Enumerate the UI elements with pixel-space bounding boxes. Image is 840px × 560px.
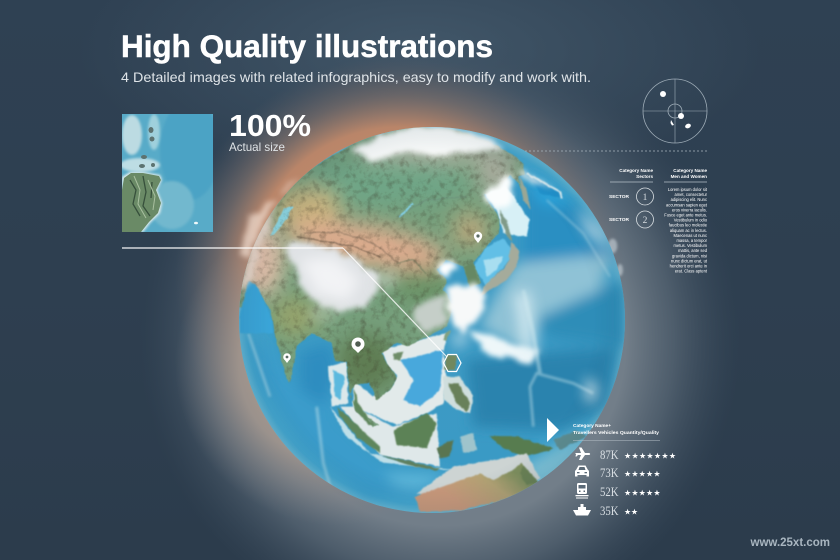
Caspian sea	[271, 207, 293, 235]
lorem ipsum paragraph: mattis, ante sed	[678, 248, 708, 253]
lorem ipsum paragraph: Vestibulum in odio	[674, 218, 708, 223]
map pin: Japan sea region	[474, 232, 482, 243]
Himalaya cloud	[282, 242, 380, 312]
table: description column: Men and Women	[671, 174, 707, 179]
row: plane 87K: ★★★★★★★	[624, 452, 676, 460]
lorem ipsum paragraph	[664, 187, 708, 274]
shallow seas	[328, 173, 562, 470]
sector row 2	[609, 211, 654, 228]
panel heading: Category Name+	[573, 423, 611, 429]
map pin: India	[283, 353, 291, 363]
lorem ipsum paragraph: massa, a tempor	[676, 238, 708, 243]
sector row 2: SECTOR	[609, 217, 629, 223]
Philippines and Indonesia	[337, 377, 587, 471]
Red Sea and west fringe	[240, 280, 273, 333]
hexagon marker	[444, 354, 461, 372]
lorem ipsum paragraph: adipiscing elit. Nunc	[671, 197, 707, 202]
Japan and Korea	[393, 177, 531, 370]
big stat: 100%: 100%	[229, 108, 311, 143]
subtitle: 4 Detailed images with related infographics, easy to modify and work with.	[121, 69, 591, 85]
sector row 1: SECTOR	[609, 194, 629, 200]
ocean light ridges	[248, 200, 610, 497]
row: car 73K: ★★★★★	[624, 470, 660, 478]
lorem ipsum paragraph: aliquam ac in lectus.	[670, 228, 707, 233]
New Guinea	[490, 437, 553, 457]
row: train 52K	[576, 483, 660, 499]
table: sectors column: Sectors	[636, 174, 653, 179]
row: plane 87K	[575, 448, 676, 462]
ocean	[235, 124, 630, 519]
lorem ipsum paragraph: Maecenas ut nunc	[674, 233, 707, 238]
stat caption: Actual size	[229, 140, 285, 154]
table: sectors column: Category Name	[619, 168, 653, 173]
panel heading: Travellers Vehicles Quantity/Quality	[573, 430, 659, 436]
lorem ipsum paragraph: gravida dictum, nisi	[672, 253, 707, 258]
radar chart	[643, 79, 707, 143]
lorem ipsum paragraph: faucibus leo molestie	[669, 223, 708, 228]
lorem ipsum paragraph: Lorem ipsum dolor sit	[668, 187, 708, 192]
row: car 73K: 73K	[600, 466, 618, 480]
lorem ipsum paragraph: eros viverra iaculis.	[672, 207, 707, 212]
row: train 52K: 52K	[600, 485, 618, 499]
leader line from inset to hexagon	[122, 248, 447, 357]
lorem ipsum paragraph: nunc dictum erat, ut	[671, 258, 708, 263]
Asia land mass	[240, 128, 525, 428]
sector row 2: 2	[643, 216, 648, 226]
map pin: Southeast Asia	[352, 338, 364, 353]
title: High Quality illustrations	[121, 28, 493, 64]
globe	[233, 120, 630, 519]
table: description column	[664, 168, 708, 274]
watermark: www.25xt.com	[750, 537, 830, 549]
row: car 73K	[575, 466, 660, 480]
lorem ipsum paragraph: erat. Class aptent	[675, 269, 708, 274]
panel heading	[573, 423, 659, 436]
sector row 1	[609, 188, 654, 205]
lorem ipsum paragraph: metus. Vestibulum	[674, 243, 708, 248]
table: sectors column	[609, 168, 654, 228]
row: ship 35K	[573, 504, 638, 518]
vehicles quality panel	[573, 423, 676, 518]
lorem ipsum paragraph: Fusce eget ante metus.	[664, 212, 707, 218]
coastal and Pacific clouds	[413, 260, 540, 363]
lorem ipsum paragraph: amet, consectetur	[674, 192, 708, 197]
row: ship 35K: 35K	[600, 504, 618, 518]
inset map: actual size detail	[122, 114, 213, 232]
row: train 52K: ★★★★★	[624, 488, 660, 498]
row: plane 87K: 87K	[600, 448, 618, 462]
row: ship 35K: ★★	[624, 508, 638, 516]
polar snow cap	[350, 127, 503, 162]
sector row 1: 1	[643, 193, 648, 203]
Australia shelf and land	[415, 453, 540, 512]
dotted leader line	[525, 150, 708, 152]
lorem ipsum paragraph: accumsan sapien eget	[666, 202, 708, 207]
sphere shading	[239, 127, 625, 513]
ocean tonal panels	[300, 176, 625, 502]
play arrow marker	[547, 418, 559, 442]
cloud fringe outside globe	[240, 177, 623, 276]
table: description column: Category Name	[673, 168, 707, 173]
lorem ipsum paragraph: hendrerit orci ante in	[670, 264, 708, 268]
